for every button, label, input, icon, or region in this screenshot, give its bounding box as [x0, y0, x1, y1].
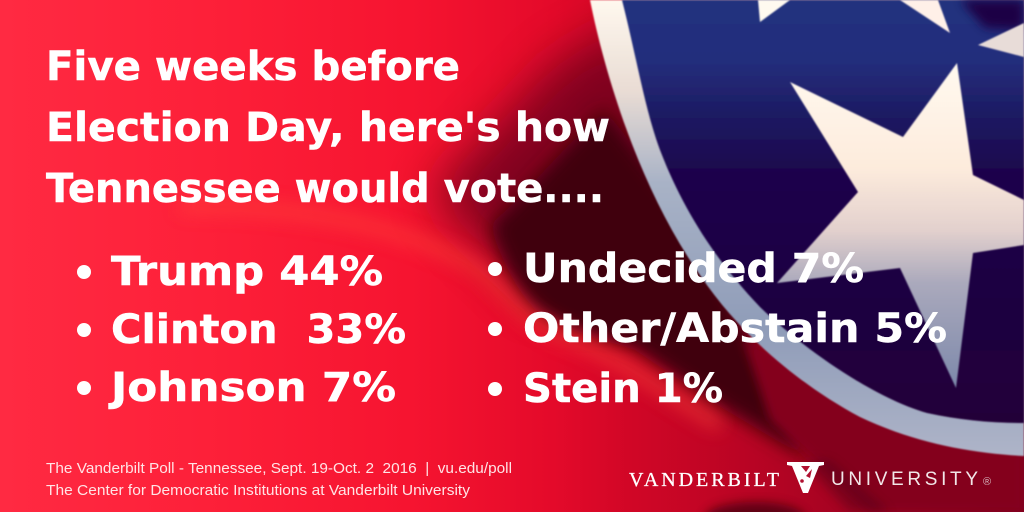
- Johnson: Johnson 7%: [108, 365, 396, 411]
- results: right column: [488, 246, 947, 412]
- star: top right: [978, 23, 1024, 57]
- Vanderbilt University logo: VANDERBILT: [629, 469, 779, 491]
- Undecided: Undecided 7%: [523, 246, 864, 292]
- Vanderbilt University logo: ®: [983, 476, 991, 488]
- Vanderbilt University logo: [629, 462, 991, 493]
- Stein: Stein 1%: [523, 366, 723, 412]
- flag: white ring of the circle: [590, 0, 1024, 456]
- Trump: Trump 44%: [111, 249, 383, 295]
- flag: blue field: [622, 0, 1024, 423]
- flag: stars: [758, 0, 1024, 388]
- icon: V shield: [787, 462, 824, 493]
- flag: dark corner shading: [960, 0, 1024, 30]
- star: main: [777, 63, 1024, 388]
- Other/Abstain: Other/Abstain 5%: [523, 306, 947, 352]
- heading: Five weeks before: [46, 44, 460, 90]
- heading: Tennessee would vote....: [46, 166, 604, 212]
- source note: [46, 460, 512, 499]
- Vanderbilt University logo: UNIVERSITY: [831, 469, 978, 490]
- source note: The Vanderbilt Poll - Tennessee, Sept. 19-Oct. 2 2016 | vu.edu/poll: [46, 460, 512, 477]
- Clinton: Clinton 33%: [111, 307, 406, 353]
- star: top left: [758, 0, 790, 22]
- star: top middle: [900, 0, 950, 33]
- source note: The Center for Democratic Institutions at Vanderbilt University: [46, 482, 471, 499]
- heading: Election Day, here's how: [46, 105, 610, 151]
- results: left column: [77, 249, 406, 411]
- heading: [46, 44, 610, 212]
